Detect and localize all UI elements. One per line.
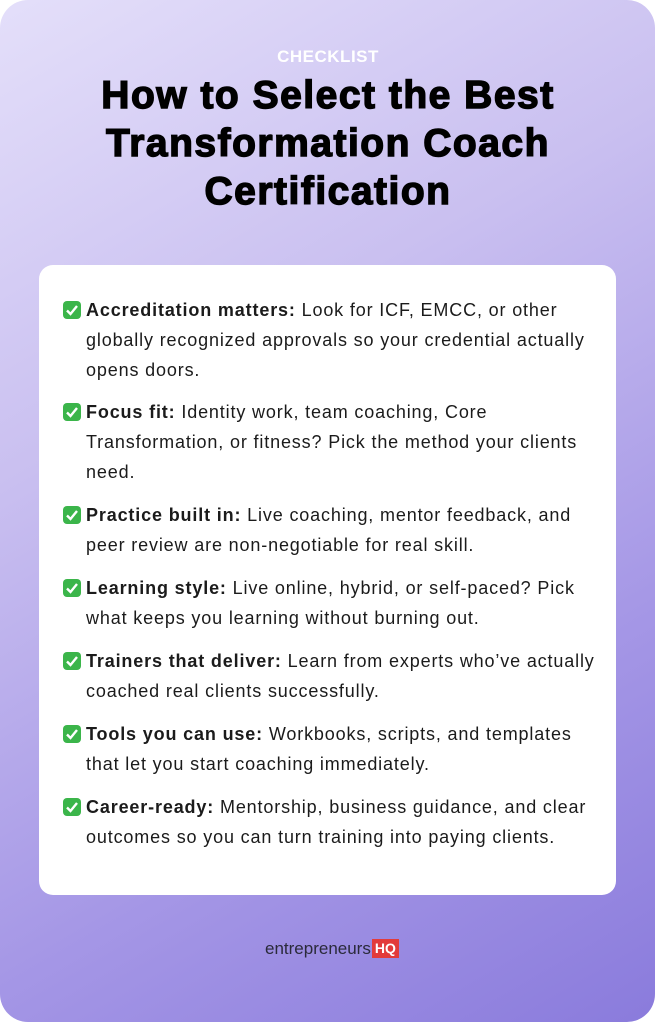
title: Certification xyxy=(204,170,452,213)
logo: entrepreneurs HQ: entrepreneurs xyxy=(265,939,371,958)
item: focus fit: Transformation, or fitness? Pick the method your clients xyxy=(86,432,577,452)
item: tools: Tools you can use: Workbooks, scripts, and templates xyxy=(86,724,572,744)
item: accreditation: globally recognized approvals so your credential actually xyxy=(86,330,585,350)
title: Transformation Coach xyxy=(106,122,550,165)
item: focus fit: need. xyxy=(86,462,135,482)
item: practice: peer review are non-negotiable for real skill. xyxy=(86,535,474,555)
item: career-ready xyxy=(63,797,586,847)
kicker: checklist: CHECKLIST xyxy=(277,47,379,66)
item: accreditation xyxy=(63,300,585,380)
item: trainers: coached real clients successfully. xyxy=(86,681,380,701)
item: tools: that let you start coaching immediately. xyxy=(86,754,430,774)
item: learning style: Learning style: Live online, hybrid, or self-paced? Pick xyxy=(86,578,575,598)
item: career-ready: Career-ready: Mentorship, business guidance, and clear xyxy=(86,797,586,817)
item: practice xyxy=(63,505,571,555)
item: career-ready: outcomes so you can turn training into paying clients. xyxy=(86,827,555,847)
item: learning style: what keeps you learning without burning out. xyxy=(86,608,480,628)
item: focus fit: Focus fit: Identity work, team coaching, Core xyxy=(86,402,487,422)
item: trainers: Trainers that deliver: Learn from experts who’ve actually xyxy=(86,651,595,671)
panel: checklist card xyxy=(39,265,616,895)
item: trainers xyxy=(63,651,595,701)
item: tools xyxy=(63,724,572,774)
item: focus fit xyxy=(63,402,577,482)
item: practice: Practice built in: Live coaching, mentor feedback, and xyxy=(86,505,571,525)
title xyxy=(101,74,555,213)
logo: entrepreneurs HQ: HQ xyxy=(375,940,396,956)
item: accreditation: Accreditation matters: Look for ICF, EMCC, or other xyxy=(86,300,557,320)
item: accreditation: opens doors. xyxy=(86,360,200,380)
item: learning style xyxy=(63,578,575,628)
title: How to Select the Best xyxy=(101,74,555,117)
